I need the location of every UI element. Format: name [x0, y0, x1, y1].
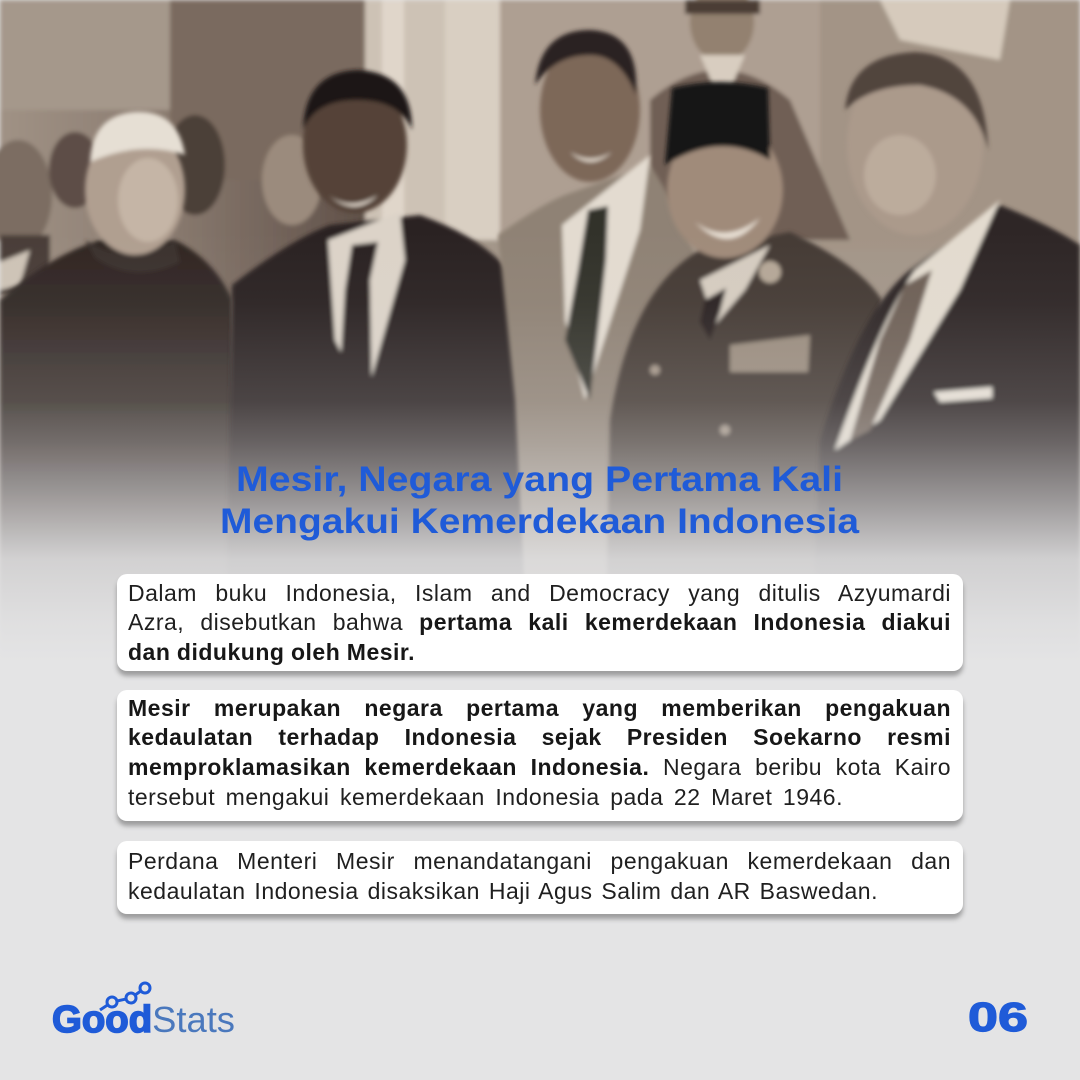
figure: Soekarno [605, 82, 882, 680]
figure: Nehru [0, 112, 240, 680]
text card 2: memproklamasikan kemerdekaan Indonesia. Negara beribu kota Kairo [128, 754, 951, 780]
text card 3: kedaulatan Indonesia disaksikan Haji Agus Salim dan AR Baswedan. [128, 878, 878, 904]
figure: Tito [810, 52, 1080, 680]
text card 3 [117, 841, 963, 914]
background photo: five leaders [0, 0, 1080, 612]
logo: GoodStats [52, 982, 235, 1040]
text card 1 [117, 574, 963, 671]
text card 2: tersebut mengakui kemerdekaan Indonesia pada 22 Maret 1946. [128, 784, 843, 810]
text card 1: Azra, disebutkan bahwa pertama kali kemerdekaan Indonesia diakui [128, 609, 951, 635]
title: Mengakui Kemerdekaan Indonesia [220, 502, 860, 541]
text card 1: dan didukung oleh Mesir. [128, 639, 415, 665]
title: Mesir, Negara yang Pertama Kali [236, 460, 843, 499]
white fade over photo [0, 230, 1080, 681]
text card 1: Dalam buku Indonesia, Islam and Democracy yang ditulis Azyumardi [128, 580, 951, 606]
text card 2: Mesir merupakan negara pertama yang memberikan pengakuan [128, 695, 951, 721]
icon: rising line chart [100, 983, 150, 1010]
logo wordmark: GoodStats [52, 999, 235, 1040]
text card 2 [117, 690, 963, 821]
portrait on the wall [650, 70, 850, 240]
figure: Nkrumah [225, 70, 530, 680]
page number: 06 [968, 994, 1028, 1040]
figure: Nasser [498, 30, 700, 680]
crowd behind left [0, 140, 52, 250]
text card 2: kedaulatan terhadap Indonesia sejak Presiden Soekarno resmi [128, 724, 951, 750]
text card 3: Perdana Menteri Mesir menandatangani pengakuan kemerdekaan dan [128, 848, 951, 874]
title [220, 460, 860, 541]
